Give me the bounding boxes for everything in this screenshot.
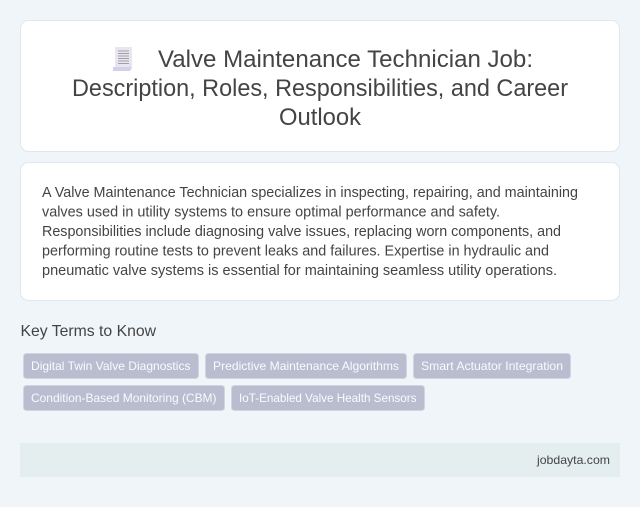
heading: Valve Maintenance Technician Job: <box>158 46 533 73</box>
tag: predictive maintenance <box>206 354 406 378</box>
tag: digital twin <box>24 354 198 378</box>
heading <box>72 46 568 131</box>
tag: iot sensors: IoT-Enabled Valve Health Sensors <box>239 391 416 405</box>
footer <box>20 443 620 477</box>
text block: description: A Valve Maintenance Technician specializes in inspecting, repairing, and maintaining <box>42 185 578 201</box>
tag: condition-based monitoring <box>24 386 224 410</box>
text block: description: performing routine tests to prevent leaks and failures. Expertise in hydraulic and <box>42 244 549 260</box>
heading: Description, Roles, Responsibilities, and Career <box>72 75 568 102</box>
tag: smart actuator <box>414 354 570 378</box>
text block: description: valves used in utility systems to ensure optimal performance and safety. <box>42 204 500 220</box>
tag: predictive maintenance: Predictive Maintenance Algorithms <box>213 359 399 373</box>
tags: key terms <box>24 354 570 410</box>
tag: condition-based monitoring: Condition-Based Monitoring (CBM) <box>31 391 217 405</box>
text block: description <box>42 185 578 279</box>
heading: Outlook <box>279 104 362 131</box>
text block: description: pneumatic valve systems is essential for maintaining seamless utility operations. <box>42 263 557 279</box>
tag: smart actuator: Smart Actuator Integration <box>421 359 563 373</box>
text block: description: Responsibilities include diagnosing valve issues, replacing worn components, and <box>42 224 561 240</box>
panel: description card <box>20 162 620 300</box>
heading: key terms: Key Terms to Know <box>20 323 156 340</box>
panel: title card <box>20 20 620 152</box>
icon: document <box>113 47 132 71</box>
footer: jobdayta.com <box>536 453 610 467</box>
tag: iot sensors <box>232 386 424 410</box>
tag: digital twin: Digital Twin Valve Diagnostics <box>31 359 190 373</box>
